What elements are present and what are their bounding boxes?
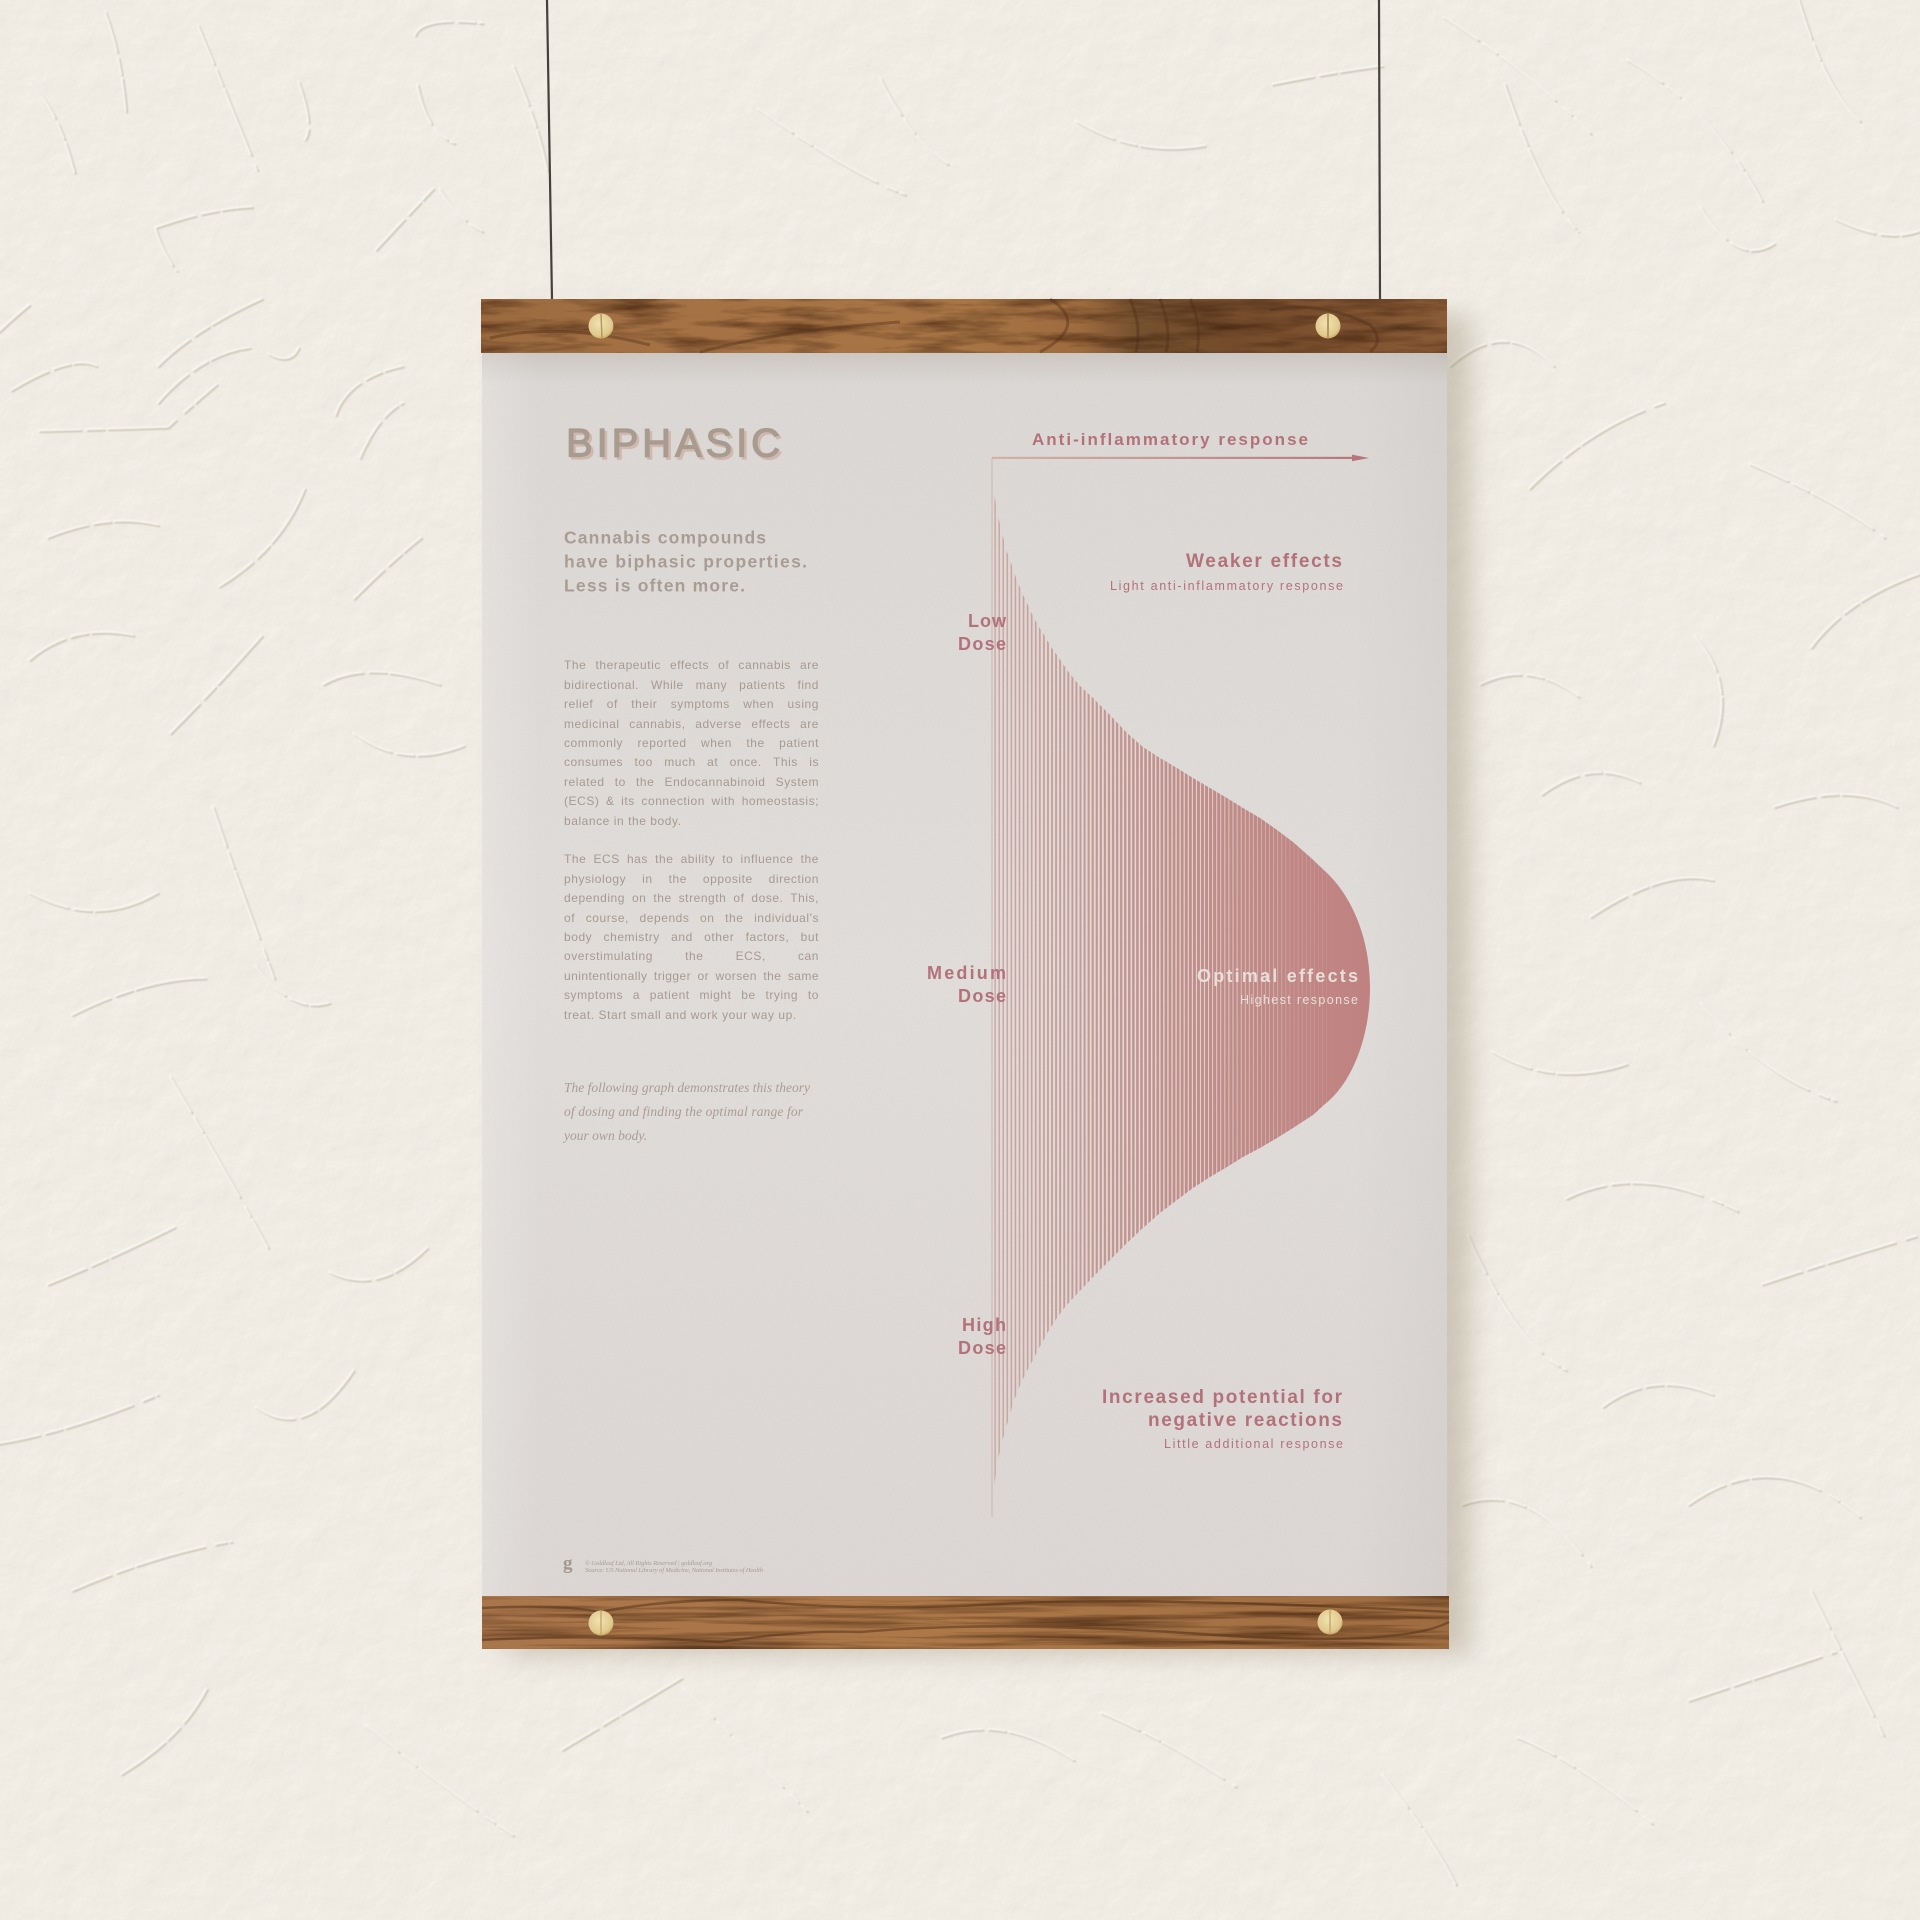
callout: negative reactions (1102, 1387, 1343, 1451)
label: medium dose (927, 963, 1006, 1006)
subheading: have biphasic properties. (564, 552, 807, 572)
label: low dose (958, 611, 1007, 654)
label: medium dose: Dose (958, 986, 1006, 1006)
callout: negative reactions: Increased potential for (1102, 1387, 1343, 1408)
body paragraph one: related to the Endocannabinoid System (564, 775, 819, 789)
body paragraph one: consumes too much at once. This is (564, 755, 819, 769)
screw: bottom left (588, 1610, 614, 1636)
screw: top right (1316, 314, 1340, 338)
body paragraph one (564, 658, 819, 828)
callout: weaker effects: Weaker effects (1186, 551, 1342, 572)
body paragraph two (564, 852, 819, 1022)
arrow: response axis (992, 455, 1369, 461)
callout: negative reactions: Little additional response (1164, 1437, 1343, 1451)
callout: negative reactions: negative reactions (1148, 1410, 1342, 1431)
poster shadow on wall (505, 315, 1471, 1655)
poster paper (482, 353, 1447, 1597)
top wooden hanger bar (481, 299, 1447, 353)
title: BIPHASIC (568, 424, 782, 468)
title: BIPHASIC (566, 422, 780, 466)
bottom wooden hanger bar (482, 1596, 1449, 1649)
body paragraph two: depending on the strength of dose. This, (564, 891, 819, 905)
footer credits: © Goldleaf Ltd, All Rights Reserved | goldleaf.org (585, 1560, 713, 1567)
body paragraph two: unintentionally trigger or worsen the same (564, 969, 819, 983)
axis title: Anti-inflammatory response (1032, 430, 1308, 449)
hanging wire: left (547, 0, 552, 300)
footer logo: g (563, 1553, 573, 1574)
callout: optimal effects (1197, 966, 1358, 1007)
footer credits (585, 1560, 764, 1574)
body paragraph two: treat. Start small and work your way up. (564, 1008, 797, 1022)
callout: weaker effects: Light anti-inflammatory response (1110, 579, 1343, 593)
label: high dose: Dose (958, 1338, 1006, 1358)
callout: weaker effects (1110, 551, 1343, 593)
footer credits: Source: US National Library of Medicine, National Institutes of Health (585, 1567, 764, 1574)
callout: optimal effects: Optimal effects (1197, 966, 1358, 986)
body paragraph one: commonly reported when the patient (564, 736, 819, 750)
subheading (564, 527, 807, 596)
body paragraph one: balance in the body. (564, 814, 682, 828)
label: medium dose: Medium (927, 963, 1006, 983)
italic note (562, 1080, 810, 1143)
hanging wire: right (1379, 0, 1380, 300)
body paragraph two: symptoms a patient might be trying to (564, 988, 819, 1002)
subheading: Cannabis compounds (564, 527, 766, 547)
body paragraph one: relief of their symptoms when using (564, 697, 819, 711)
italic note: your own body. (562, 1128, 647, 1143)
body paragraph two: physiology in the opposite direction (564, 872, 819, 886)
chart: dose response bell curve (927, 430, 1371, 1530)
body paragraph one: bidirectional. While many patients find (564, 678, 819, 692)
label: low dose: Low (968, 611, 1007, 631)
italic note: of dosing and finding the optimal range for (564, 1104, 804, 1119)
body paragraph two: overstimulating the ECS, can (564, 949, 819, 963)
body paragraph one: (ECS) & its connection with homeostasis; (564, 794, 819, 808)
label: high dose: High (962, 1315, 1006, 1335)
screw: top left (588, 314, 614, 338)
body paragraph one: The therapeutic effects of cannabis are (564, 658, 819, 672)
subheading: Less is often more. (564, 576, 745, 596)
body paragraph two: The ECS has the ability to influence the (564, 852, 819, 866)
screw: bottom right (1318, 1610, 1342, 1634)
vertical dose axis (991, 458, 993, 1517)
body paragraph one: medicinal cannabis, adverse effects are (564, 717, 819, 731)
body paragraph two: of course, depends on the individual's (564, 911, 819, 925)
italic note: The following graph demonstrates this theory (564, 1080, 810, 1095)
line-filled bell curve (995, 480, 1371, 1530)
label: low dose: Dose (958, 634, 1006, 654)
body paragraph two: body chemistry and other factors, but (564, 930, 819, 944)
label: high dose (958, 1315, 1006, 1358)
callout: optimal effects: Highest response (1240, 993, 1358, 1007)
